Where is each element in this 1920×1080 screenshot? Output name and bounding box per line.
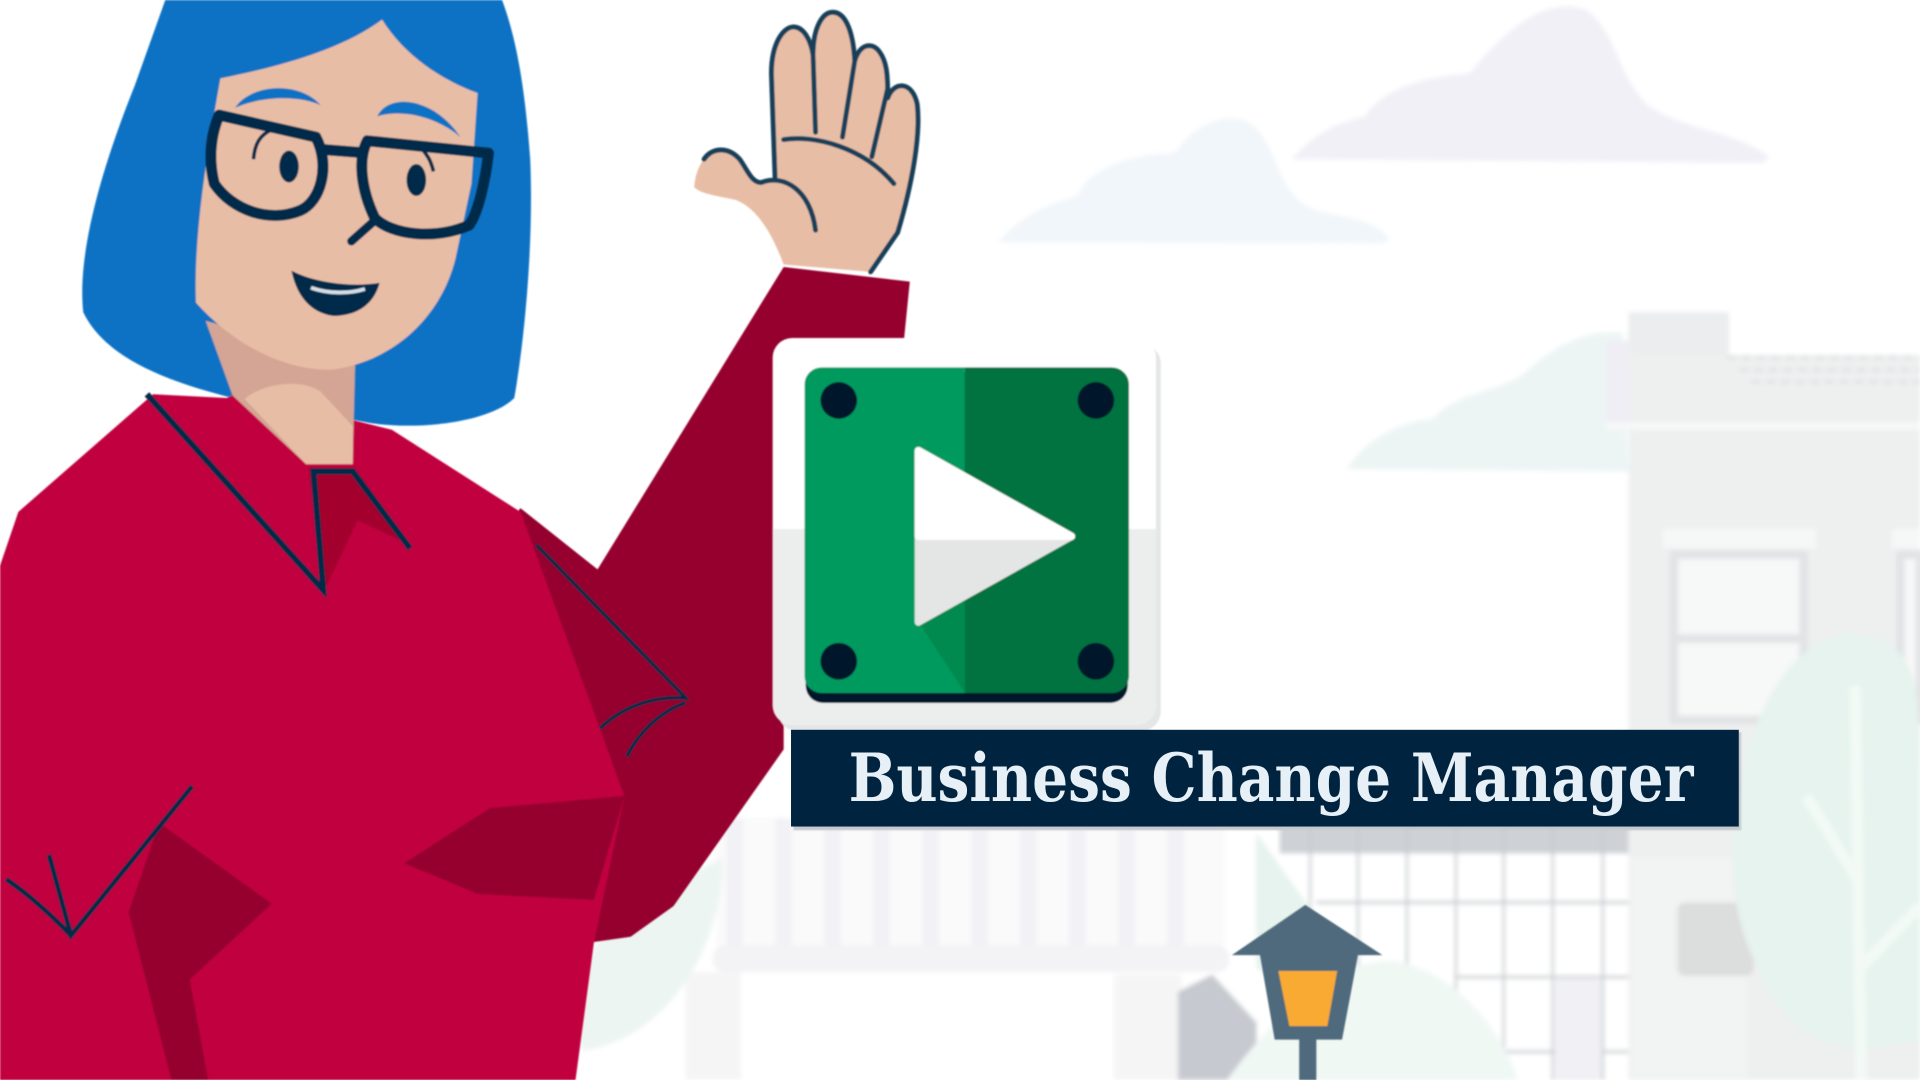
shirt body	[0, 389, 624, 1080]
glasses	[211, 115, 489, 241]
shirt shadows and creases	[6, 519, 688, 1080]
lamp glass	[1278, 971, 1337, 1026]
window	[1663, 529, 1816, 720]
cloud: centre	[998, 118, 1390, 244]
eyes	[279, 151, 426, 196]
neck highlight	[245, 384, 353, 464]
bush: centre	[1227, 961, 1518, 1080]
eyebrows	[235, 88, 460, 137]
cloud: upper right	[1292, 6, 1769, 163]
screw holes	[820, 382, 1114, 680]
waving hand	[694, 12, 918, 272]
card base	[773, 338, 1161, 731]
collar and tie	[147, 394, 410, 590]
hair	[82, 0, 531, 426]
awning	[713, 818, 1229, 972]
building: right	[1607, 312, 1920, 1080]
green button	[804, 367, 1129, 703]
neck	[206, 321, 355, 464]
mouth	[291, 271, 380, 316]
play triangle	[918, 451, 1071, 622]
character: woman waving	[0, 0, 918, 1080]
face	[196, 20, 478, 370]
background: faded town	[580, 6, 1920, 1080]
cloud: lower right	[1347, 332, 1629, 471]
title banner	[791, 730, 1741, 830]
lamp post	[1232, 905, 1382, 1080]
play button card	[773, 338, 1161, 731]
tree: small behind lamp	[1256, 833, 1313, 980]
banner title text: Business Change Manager	[849, 739, 1694, 817]
raised arm sleeve	[490, 267, 910, 943]
shop window grid	[1273, 827, 1629, 1080]
bush: left	[580, 857, 722, 1051]
storefront wall	[686, 972, 1256, 1080]
tree: right	[1733, 633, 1920, 1080]
